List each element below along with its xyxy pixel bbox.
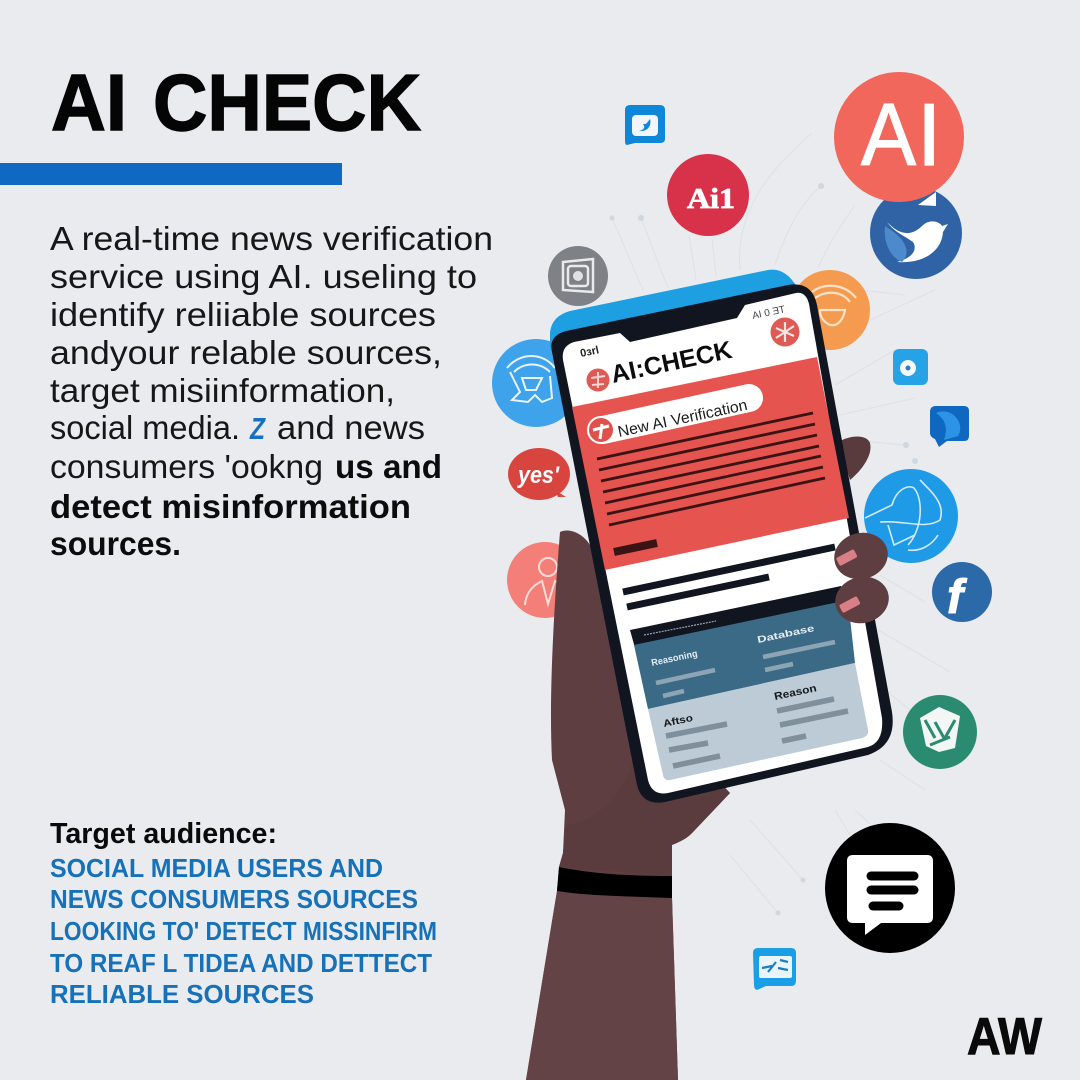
AW logo: AW <box>967 1008 1043 1066</box>
icon: red Ai1 circle <box>667 154 749 236</box>
fingers over phone <box>829 527 894 629</box>
description text block: identify reliiable sources <box>50 296 436 333</box>
icon: blue chat bird square <box>625 105 665 145</box>
blue title rule <box>0 163 342 185</box>
icon: AI coral circle: I <box>917 85 941 184</box>
icon: dark blue chat square <box>930 406 969 447</box>
target audience text: RELIABLE SOURCES <box>50 979 314 1009</box>
data table card: Aftso <box>662 713 694 730</box>
phone header title: AI:CHECK <box>608 336 735 389</box>
icon: yes speech bubble <box>508 448 570 500</box>
title <box>51 58 421 147</box>
icon: small blue chat <box>753 948 796 990</box>
hand and arm <box>526 436 870 1080</box>
icon: red Ai1 circle: Ai1 <box>687 184 735 215</box>
phone blue back edge <box>550 270 797 348</box>
icon: grey camera circle <box>548 246 608 306</box>
description text block: and news <box>277 409 425 446</box>
icon: AI coral circle <box>834 72 964 279</box>
phone screen <box>563 293 882 793</box>
header icon right <box>770 318 800 346</box>
description text block: us and <box>335 448 442 485</box>
description text block: service using AI. useling to <box>50 258 477 295</box>
phone: AI 0 ƎT <box>751 304 786 322</box>
target audience text: TO REAF L TIDEA AND DETTECT <box>50 948 432 978</box>
icon: yes speech bubble: yes' <box>517 462 560 489</box>
description text block: social media. <box>50 409 240 446</box>
target audience text: SOCIAL MEDIA USERS AND <box>50 853 383 883</box>
description text block <box>50 220 493 562</box>
phone <box>550 270 893 803</box>
target audience text: NEWS CONSUMERS SOURCES <box>50 884 418 914</box>
icon: AI coral circle: A <box>861 85 916 184</box>
wrist band <box>557 867 672 898</box>
target audience heading: Target audience: <box>50 818 277 850</box>
phone body <box>551 284 893 803</box>
icon: black message circle <box>825 823 955 953</box>
data table card: Database <box>756 623 815 646</box>
icon: green envelope circle <box>903 695 977 769</box>
icon: facebook circle: f <box>947 571 967 624</box>
description text block: target misiinformation, <box>50 372 395 409</box>
description text block: Z <box>249 411 266 446</box>
description text block: consumers 'ookng <box>50 448 323 485</box>
lines below red panel <box>623 547 835 607</box>
article text lines <box>597 413 825 525</box>
target audience text: LOOKING TO' DETECT MISSINFIRM <box>50 916 437 946</box>
data table card: Reason <box>773 682 818 703</box>
icon: pink person circle <box>507 542 583 618</box>
red panel <box>572 357 849 570</box>
icon: blue globe circle <box>864 469 958 563</box>
description text block: sources. <box>50 525 181 562</box>
header icon left <box>586 368 610 392</box>
verification pill: New AI Verification <box>616 397 749 441</box>
description text block: detect misinformation <box>50 488 411 525</box>
target audience text <box>50 853 437 1009</box>
icon: facebook circle <box>932 562 992 624</box>
forearm tone <box>526 891 678 1080</box>
phone status text: 0ɜrl <box>579 344 600 360</box>
title: AI <box>51 58 127 147</box>
icon: orange wifi circle <box>790 270 870 350</box>
title: CHECK <box>153 58 421 147</box>
description text block: A real-time news verification <box>50 220 493 257</box>
finger behind phone <box>838 436 870 480</box>
icon: blue wifi circle <box>492 339 580 427</box>
data table card: Reasoning <box>650 648 699 669</box>
icon: small blue square <box>893 349 928 385</box>
dark bar on red panel <box>614 543 657 552</box>
description text block: andyour relable sources, <box>50 334 442 371</box>
data table card <box>630 586 868 780</box>
